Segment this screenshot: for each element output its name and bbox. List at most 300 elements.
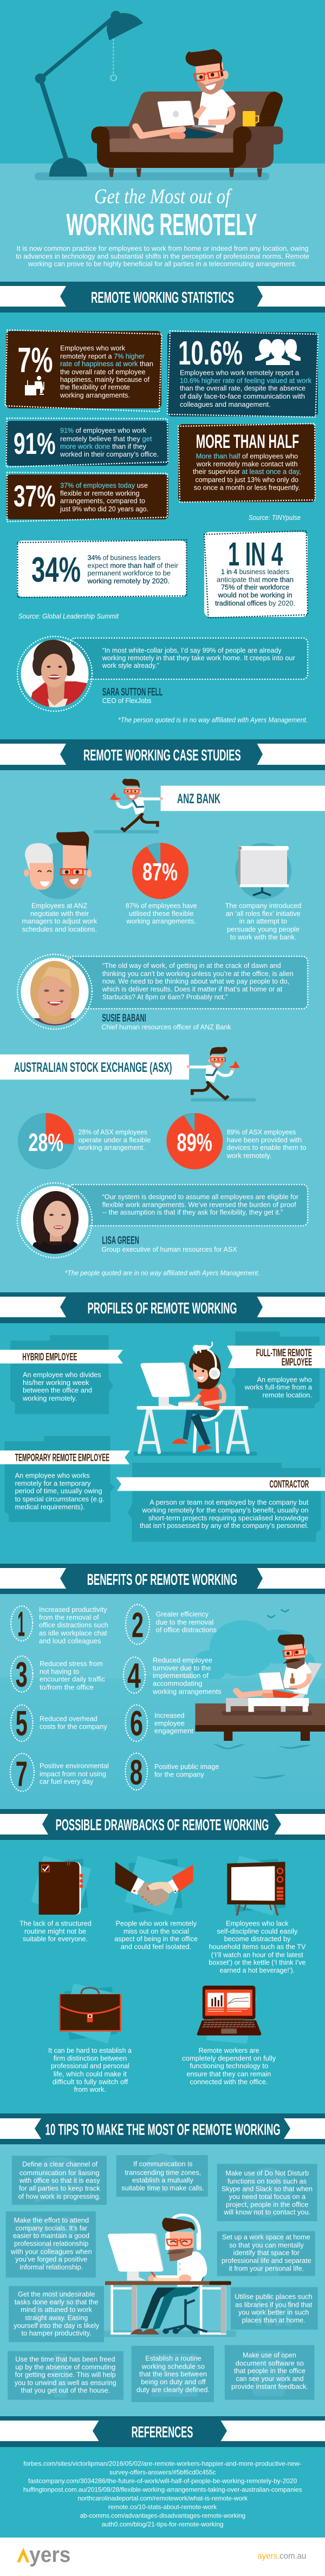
panel: 91% stat: more work done than if they [60,443,146,451]
tip panel 10: can see your work and [236,2375,303,2383]
illustration: clouds [192,1621,315,1683]
panel: 34% stat: permanent workforce to be [88,569,171,577]
text: drawbacks row one: The lack of a structured [20,1919,92,1927]
icon: laptop with charts [197,1986,261,2044]
panel: full-time remote employee: An employee who [257,1375,312,1383]
benefit 4: accommodating [153,1680,203,1688]
tip panel 10: Make use of open [243,2351,296,2359]
benefit 2: Greater efficiency [156,1610,209,1618]
references list: auth0.com/blog/21-tips-for-remote-working [102,2521,223,2528]
icon: two smiling faces [24,831,92,899]
icon: briefcase [59,1983,121,2044]
tip panel 1: with office so that it is easy [19,2176,100,2184]
text: ANZ facts: utilised these flexible [129,909,193,918]
benefit 6: 6 [130,1703,143,1743]
benefit 3: not having to [40,1668,79,1676]
panel: 7% stat: the flexibility of remote [60,383,130,391]
pie chart: 89% [166,1113,223,1169]
panel: temporary remote employee: to special circumstances (e.g. [15,1495,105,1503]
tip panel 5: identify that space for [233,2248,300,2256]
tip panel 4: company socials. It’s far [16,2224,88,2232]
benefit 6: employee [154,1719,185,1727]
panel: 34% stat: 34% [31,550,81,589]
panel: hybrid employee: his/her working week [23,1378,89,1387]
text: drawbacks row two: Remote workers are [199,2046,259,2054]
tip panel 4: informal relationship. [20,2263,83,2271]
source: Global Leadership Summit: Source: Global Leadership Summit [18,612,119,620]
panel: temporary remote employee: period of time, usually owing [15,1487,102,1495]
tip panel 4: easier to maintain a good [13,2232,89,2240]
benefit 1: as idle workplace chat [39,1629,107,1637]
benefit 8: 8 [130,1752,142,1792]
tip panel 7: you work better in such [238,2308,309,2316]
panel: 10.6% stat: 10.6% [178,335,243,372]
tip panel 1: Define a clear channel of [22,2160,98,2168]
benefit 3: Reduced stress from [40,1660,103,1668]
tip panel 8: you to unwind as well as ensuring [15,2378,116,2386]
tip panel 6 [9,2286,104,2342]
panel: temporary remote employee: remotely for a temporary [15,1479,91,1487]
tip panel 3: functions on tools such as [227,2177,307,2185]
quote attribution: Sara Sutton Fell: CEO of FlexJobs [102,697,152,705]
quote: Lisa Green: “Our system is designed to assume all employees are eligible for [102,1193,299,1201]
website address: ayers.com.au [257,2552,306,2561]
benefit 1: and loud colleagues [39,1637,101,1645]
references list: fastcompany.com/3034286/the-future-of-work/will-half-of-people-be-working-remotely-by-2020 [28,2477,297,2485]
quote attribution: Lisa Green: Group executive of human resources for ASX [102,1245,237,1253]
panel: 91% stat: worked in their company’s office. [60,450,159,458]
banner: references [0,2416,325,2447]
benefit 7: impact from not using [40,1770,106,1778]
text: drawbacks row one: become distracted by [224,1935,291,1943]
panel: 10.6% stat: 10.6% higher rate of feeling valued at work [180,376,311,385]
tip panel 3: Skype and Slack so that when [222,2184,313,2193]
source: TINYpulse: Source: TINYpulse [249,513,301,522]
panel: 37% stat: arrangements, compared to [60,497,145,505]
panel: 1 in 4 stat: 1 in 4 business leaders [221,568,289,576]
tip panel 4: Make the effort to attend [14,2216,89,2224]
panel: 10.6% stat: Employees who work remotely report a [180,369,300,377]
illustration: running man mirrored [187,1047,256,1102]
icon: notebook [31,1856,91,1916]
quote: Susie Babani: now. We need to be thinking about what we pay people to do, [102,977,289,985]
quote: Sara Sutton Fell: work style already.” [102,661,159,669]
section background: statistics [0,313,325,739]
panel: hybrid employee: An employee who divides [23,1371,101,1379]
panel: 7% stat: happiness, mainly because of [60,375,150,383]
heading: Australian Stock Exchange [0,1055,189,1079]
title: Get the Most out of [94,185,232,208]
quote: Lisa Green: flexible work arrangements. We’ve reversed the burden of proof [102,1201,296,1209]
benefit 1: 1 [17,1604,25,1644]
panel: 91% stat [6,418,168,467]
text: ANZ facts: to work with the bank. [230,933,296,941]
panel: full-time remote employee [227,1331,325,1408]
tip panel 5: it from your personal life. [229,2265,304,2273]
references list: forbes.com/sites/victorlipman/2016/05/02/are-remote-workers-happier-and-more-productive-new- [23,2460,302,2468]
quote: Sara Sutton Fell: working remotely in that they take work home. It creeps into our [102,654,295,662]
panel: temporary remote employee: An employee who works [15,1472,90,1480]
tip panel 4: with your colleagues when [10,2247,92,2255]
benefit 4: turnover due to the [153,1664,211,1672]
panel: full-time remote employee: works full-time from a [244,1383,313,1391]
panel: 91% stat: 91% of employees who work [60,426,146,434]
text: drawbacks row one: Employees who lack [226,1919,289,1927]
logo: ayers: yers [29,2543,70,2567]
section background: references [0,2447,325,2538]
benefit 5: Reduced overhead [40,1714,98,1722]
tip panel 6: to hamper productivity. [21,2329,92,2337]
tip panel 10: provide instant feedback. [231,2383,308,2391]
tip panel 1: of how work is progressing. [18,2192,101,2200]
text: ANZ facts: The company introduced [225,902,301,910]
hero background [0,0,325,282]
tip panel 6: mind is attuned to work [21,2306,92,2314]
panel: temporary remote employee [0,1436,130,1522]
benefit 6: Increased [154,1711,184,1719]
text: drawbacks row one: suitable for everyone. [23,1935,88,1943]
benefit 7: 7 [16,1754,28,1793]
tip panel 7: places than at home. [242,2316,306,2324]
panel: 7% stat: the overall rate of employee [60,368,146,376]
icon: flip chart [235,843,291,899]
icon: sofa [91,92,283,177]
benefit 2: due to the removal [156,1618,213,1626]
panel: 1 in 4 stat: traditional offices by 2020. [215,599,295,607]
tip panel 5: so that you can mentally [229,2241,304,2249]
panel: temporary remote employee: TEMPORARY REMOTE EMPLOYEE [15,1453,109,1464]
illustration: running man with megaphone [94,779,163,834]
banner: references: REFERENCES [132,2424,193,2441]
text: 89% fact: have been provided with [227,1136,302,1144]
panel: 7% stat: remotely report a 7% higher [60,352,145,360]
benefit 4: working arrangements [152,1687,222,1695]
tip panel 2: If communication is [133,2159,193,2168]
panel: 1 in 4 stat: 1 IN 4 [228,536,283,573]
tip panel 9: working schedule so [141,2362,205,2370]
benefit 5: 5 [16,1703,28,1743]
text: 28% fact [78,1128,151,1152]
text: ANZ facts: Employees at ANZ [31,902,87,910]
tip panel 3 [217,2164,317,2221]
text: 89% fact [226,1128,306,1160]
tip panel 2 [116,2154,208,2197]
panel: 34% stat: expect more than half of their [88,562,179,570]
quote: Susie Babani: Starbucks? At 8pm or 6am? Probably not.” [102,993,227,1001]
text: drawbacks row one: (‘I’ll watch an hour of the latest [211,1950,303,1959]
tip panel 8: Use the time that has been freed [15,2355,115,2363]
quote attribution: Susie Babani [102,1012,231,1031]
quote: Lisa Green: -- the assumption is that if they ask for flexibility, they get it.” [102,1208,283,1217]
banner: remote working statistics [0,282,325,313]
panel: 34% stat: 34% of business leaders [88,554,161,562]
text: drawbacks row two [48,2046,276,2093]
benefit 8: Positive public image [154,1762,219,1771]
text: drawbacks row two: professional and personal [51,2062,129,2070]
panel: hybrid employee [0,1335,123,1414]
intro text [16,244,309,268]
benefit 1: Increased productivity [39,1605,107,1614]
tip panel 8: that you get out of the house. [21,2386,110,2395]
quote: Susie Babani: thinking you can’t be working unless you’re at the office, is alien [102,970,294,978]
panel: 1 in 4 stat: would not be working in [218,591,292,599]
quote: Sara Sutton Fell [17,636,308,711]
text: ANZ facts: negotiate with their [30,909,89,918]
quote: Lisa Green [17,1183,308,1258]
icon: group of people [255,339,301,365]
quote attribution: Lisa Green [102,1235,237,1253]
text: drawbacks row one: earned a hot beverage!’). [220,1966,295,1974]
tip panel 9 [132,2346,214,2402]
section background: profiles [0,1323,325,1564]
text: drawbacks row two: firm distinction between [54,2054,127,2063]
panel: hybrid employee: HYBRID EMPLOYEE [22,1352,77,1363]
text: drawbacks row one: aspect of being in the office [114,1935,198,1943]
tip panel 4: professional relationship [14,2240,88,2248]
benefit 7: car fuel every day [40,1777,93,1785]
benefit 4: Reduced employee [153,1656,212,1664]
panel: contractor [116,1463,325,1542]
banner: drawbacks [0,1809,325,1840]
benefit 7: Positive environmental [40,1762,109,1770]
text: ANZ facts [22,902,301,941]
benefit 8: for the company [154,1771,204,1779]
panel: 7% stat: working arrangements. [60,391,130,399]
text: 89% fact: work remotely. [226,1152,271,1160]
heading: ANZ Bank: ANZ BANK [177,791,220,806]
pie chart: 28% [18,1113,74,1169]
pie chart: 87% [132,843,188,899]
benefit 5: costs for the company [40,1722,107,1731]
quote attribution: Susie Babani: SUSIE BABANI [102,1012,146,1024]
panel: 91% stat: remotely believe that they get [60,435,152,443]
tip panel 4 [6,2211,96,2278]
panel: 1 in 4 stat [204,531,308,618]
tip panel 4: you’ve forged a positive [15,2255,87,2263]
panel: more than half stat: their supervisor at least once a day, [193,467,301,476]
tip panel 6: Get the most undesirable [18,2290,95,2298]
tip panel 10 [225,2345,314,2400]
panel: 1 in 4 stat: anticipate that more than [217,576,294,584]
intro text: to advances in technology and substantial shifts in the perception of professional norms. Remote [16,252,309,261]
panel: 10.6% stat: colleagues and management. [180,400,271,408]
tip panel 5 [217,2231,315,2276]
text: ANZ facts: 87% of employees have [126,902,197,910]
photo: Susie Babani [17,954,92,1029]
benefit 8 [126,1752,219,1792]
panel: 7% stat [5,330,161,412]
tip panel 6: yourself into the day is likely [14,2321,99,2330]
text: drawbacks row one: routine might not be [24,1927,86,1935]
tip panel 3: will know not to contact you. [223,2208,310,2216]
icon: man with laptop [136,49,236,139]
tip panel 7: as libraries if you find that [235,2300,313,2308]
tip panel 3: Make use of Do Not Disturb [225,2169,309,2177]
tip panel 8 [8,2351,123,2400]
panel: temporary remote employee: medical requirements). [15,1503,85,1511]
benefit 2: of office distractions [156,1625,217,1634]
tip panel 9: being on duty and off [141,2378,206,2386]
disclaimer: *The person quoted is in no way affiliated with Ayers Management. [118,715,308,724]
icon: person at desk [25,376,44,395]
panel: 37% stat: just 9% who did 20 years ago. [60,505,148,513]
tip panel 1 [12,2156,107,2205]
section background: benefits sky and sea [0,1594,325,1809]
tip panel 3: you need total focus on a [229,2193,306,2201]
panel: contractor: A person or team not employed by the company but [150,1498,309,1506]
references list [23,2460,302,2528]
tip panel 3: project, people in the office [226,2201,308,2209]
tip panel 5: Set up a work space at home [222,2233,310,2241]
benefit 6: engagement [154,1727,193,1735]
title [66,185,257,242]
tip panel 1: for all parties to keep track [19,2184,100,2193]
references list: northcarolinadeportal.com/remotework/what-is-remote-work [78,2495,248,2502]
text: drawbacks row one: and could feel isolated. [121,1943,191,1951]
panel: contractor: that isn’t possessed by any of the company’s personnel. [140,1521,309,1530]
pie chart: 87%: 87% [142,858,178,886]
icon: handshake [115,1856,193,1916]
benefit 1: office distractions such [39,1621,108,1629]
text: drawbacks row two: functioning technology to [190,2062,268,2070]
tip panel 1: communication for liaising [20,2169,100,2177]
tip panel 9: Establish a routine [145,2354,202,2363]
panel: 37% stat [6,472,168,522]
quote attribution: Sara Sutton Fell [102,686,162,705]
section background: case studies [0,770,325,1292]
panel: 34% stat: working remotely by 2020. [87,577,170,585]
references list: survey-offers-answers/#5bf6cd0c455c [109,2469,216,2476]
section background: tips [0,2144,325,2416]
panel: more than half stat: work remotely make contact with [196,460,298,468]
text: 89% fact: devices to enable them to [227,1143,306,1152]
benefit 2 [126,1604,217,1645]
panel: 7% stat: 7% [17,340,53,380]
heading: Australian Stock Exchange: AUSTRALIAN STOCK EXCHANGE (ASX) [14,1060,172,1075]
panel: 37% stat: 37% of employees today use [60,482,148,490]
photo: Sara Sutton Fell [17,636,92,711]
panel: hybrid employee: between the office and [23,1386,92,1394]
text: ANZ facts: working arrangements. [126,917,196,925]
panel: more than half stat: More than half of employees who [196,452,298,460]
panel: 37% stat: 37% [14,479,55,513]
tip panel 7: Utilise public places such [235,2293,313,2301]
panel: 10.6% stat: than the overall rate, despite the absence [180,384,306,392]
heading: ANZ Bank [161,786,325,811]
benefit 1: from the removal of [39,1614,99,1622]
quote: Sara Sutton Fell: “In most white-collar jobs, I’d say 99% of people are already [102,646,282,654]
panel: 7% stat: Employees who work [60,344,125,352]
text: drawbacks row two: completely dependent on fully [182,2054,276,2063]
illustration: woman at desk with cat [134,1342,257,1456]
quote attribution: Sara Sutton Fell: SARA SUTTON FELL [102,686,162,698]
text: drawbacks row two: It can be hard to establish a [48,2046,132,2054]
text: drawbacks row two: from work. [74,2085,106,2093]
disclaimer: *The people quoted are in no way affiliated with Ayers Management. [65,1269,260,1277]
panel: 10.6% stat: of daily face-to-face communication with [180,392,305,400]
panel: full-time remote employee: remote location. [262,1391,312,1399]
panel: 34% stat [17,540,186,597]
text: drawbacks row two: connected with the office. [190,2078,268,2086]
quote attribution: Lisa Green: LISA GREEN [102,1235,139,1247]
panel: contractor: working remotely for the company’s benefit, usually on [142,1506,309,1514]
section background: drawbacks [0,1840,325,2113]
panel: 10.6% stat [167,331,318,417]
benefit 2: 2 [132,1605,144,1645]
benefit 3: to/from the office [40,1683,94,1691]
tip panel 7 [231,2287,318,2330]
pie chart: 28%: 28% [28,1128,63,1156]
text: drawbacks row two: life, which could make it [54,2070,127,2078]
tip panel 9: that the lines between [139,2370,207,2378]
panel: 91% stat: 91% [14,426,55,460]
banner: profiles [0,1292,325,1323]
banner: tips [0,2113,325,2144]
banner: case studies [0,739,325,770]
text: drawbacks row one: boxset’) or the kettle (‘I think I’ve [209,1958,306,1966]
text: drawbacks row one: household items such as the TV [209,1943,306,1951]
icon: television [227,1856,286,1916]
tip panel 2: transcending time zones, [125,2168,201,2176]
tip panel 6: straight away. Easing [25,2313,88,2321]
banner: benefits [0,1564,325,1594]
text: 28% fact: 28% of ASX employees [79,1128,147,1136]
benefit 4 [123,1656,222,1695]
text: 28% fact: operate under a flexible [79,1136,151,1144]
benefit 3: 3 [16,1655,28,1694]
intro text: It is now common practice for employees to work from home or indeed from any location, owing [17,244,309,252]
tip panel 10: that people in the office [234,2366,306,2375]
text: drawbacks row one: People who work remotely [116,1919,197,1927]
text: ANZ facts: schedules and locations. [22,925,97,933]
footer [0,2538,325,2576]
panel: more than half stat: compared to just 13% who only do [195,476,298,484]
text: ANZ facts: an ‘all roles flex’ initiative [226,909,301,918]
tip panel 2: suitable time to make calls. [121,2184,204,2192]
text: drawbacks row one: self-discipline could easily [217,1927,298,1935]
text: drawbacks row one: miss out on the social [123,1927,189,1935]
references list: remote.co/10-stats-about-remote-work [108,2503,217,2511]
illustration: bearded man at desk with headphones [103,2215,236,2337]
intro text: working can prove to be highly beneficial for all parties in a telecommuting arrangement. [28,260,297,268]
benefit 3 [11,1655,105,1694]
benefit 7 [10,1753,109,1793]
panel: more than half stat [178,424,315,502]
panel: more than half stat: so once a month or less frequently. [194,484,300,492]
benefit 4: implementation of [153,1671,209,1680]
quote attribution: Susie Babani: Chief human resources officer of ANZ Bank [102,1023,231,1031]
quote: Susie Babani: “The old way of work, of getting in at the crack of dawn and [102,961,281,970]
benefit 6 [126,1703,193,1743]
references list: huffingtonpost.com.au/2015/08/28/flexible-working-arrangements-taking-over-australian-companies [23,2486,302,2494]
benefit 1 [11,1604,108,1645]
hero illustration: man on sofa with lamp [35,11,283,180]
text: drawbacks row two: difficult to fully switch off [53,2078,128,2086]
photo: Lisa Green [17,1183,92,1258]
panel: hybrid employee: working remotely. [22,1394,77,1402]
icon: mug [243,111,258,126]
tip panel 2: establish a mutually [132,2176,193,2184]
text: 89% fact: 89% of ASX employees [227,1128,296,1136]
text: 28% fact: working arrangement. [78,1143,145,1152]
tip panel 6: tasks done early so that the [15,2298,98,2306]
tip panel 10: document software so [236,2359,304,2367]
text: ANZ facts: in an attempt to [239,917,287,925]
references list: ab-comms.com/advantages-disadvantages-remote-working [80,2512,245,2520]
tip panel 9: duty are clearly defined. [136,2386,210,2394]
panel: 37% stat: flexible or remote working [60,489,140,497]
tip panel 8: up by the absence of commuting [15,2363,115,2371]
